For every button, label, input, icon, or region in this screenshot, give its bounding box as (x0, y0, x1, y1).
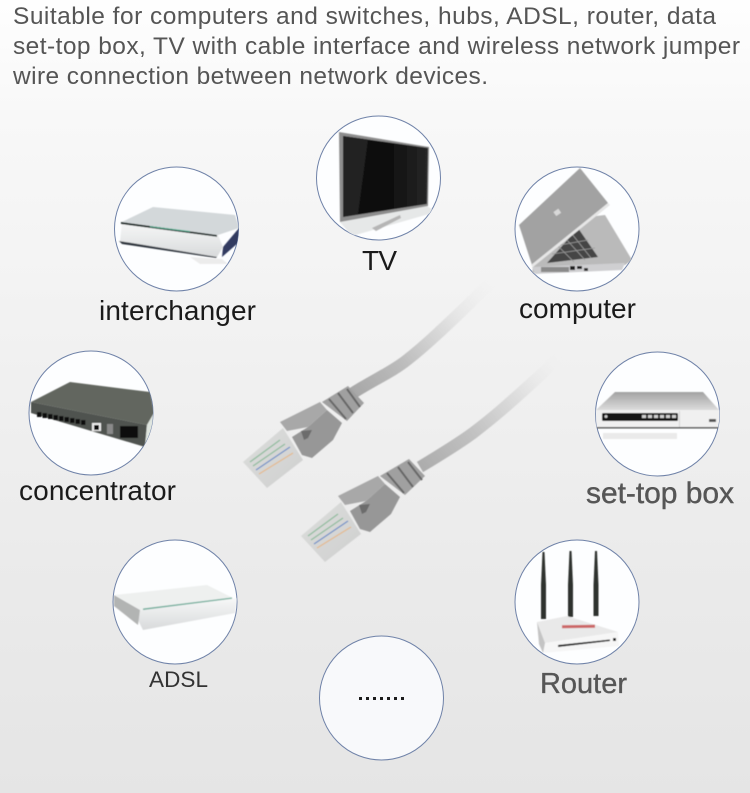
panel: more devices (320, 636, 444, 760)
heading: usage description: wire connection between network devices. (12, 63, 488, 90)
label: set-top box: set-top box (586, 477, 734, 510)
label: router: Router (540, 668, 627, 700)
panel: TV (316, 116, 440, 276)
connector: upper (243, 386, 364, 488)
label: computer: computer (519, 293, 636, 324)
label: interchanger: interchanger (99, 295, 256, 326)
network cable: lower (301, 357, 560, 562)
icon: television (339, 132, 436, 236)
icon: wireless router (537, 551, 619, 653)
network cable: upper (243, 277, 497, 488)
heading: usage description (12, 3, 740, 90)
icon: concentrator device (31, 382, 154, 447)
panel: router (515, 540, 639, 700)
heading: usage description: set-top box, TV with cable interface and wireless network jumper (13, 33, 740, 60)
panel: interchanger (99, 167, 256, 326)
panel: computer (515, 167, 639, 324)
label: ADSL: ADSL (149, 667, 208, 692)
label: TV: TV (362, 245, 397, 276)
heading: usage description: Suitable for computers and switches, hubs, ADSL, router, data (13, 3, 716, 30)
panel: concentrator (19, 351, 176, 506)
icon: laptop (519, 168, 632, 274)
icon: set-top box device (596, 392, 720, 439)
label: concentrator: concentrator (19, 475, 176, 506)
ellipsis dots (359, 697, 404, 700)
panel: ADSL (113, 540, 237, 692)
icon: ADSL modem (114, 585, 237, 630)
icon: interchanger device (119, 207, 239, 264)
connector: lower (301, 459, 425, 562)
panel: set-top box (586, 352, 734, 510)
